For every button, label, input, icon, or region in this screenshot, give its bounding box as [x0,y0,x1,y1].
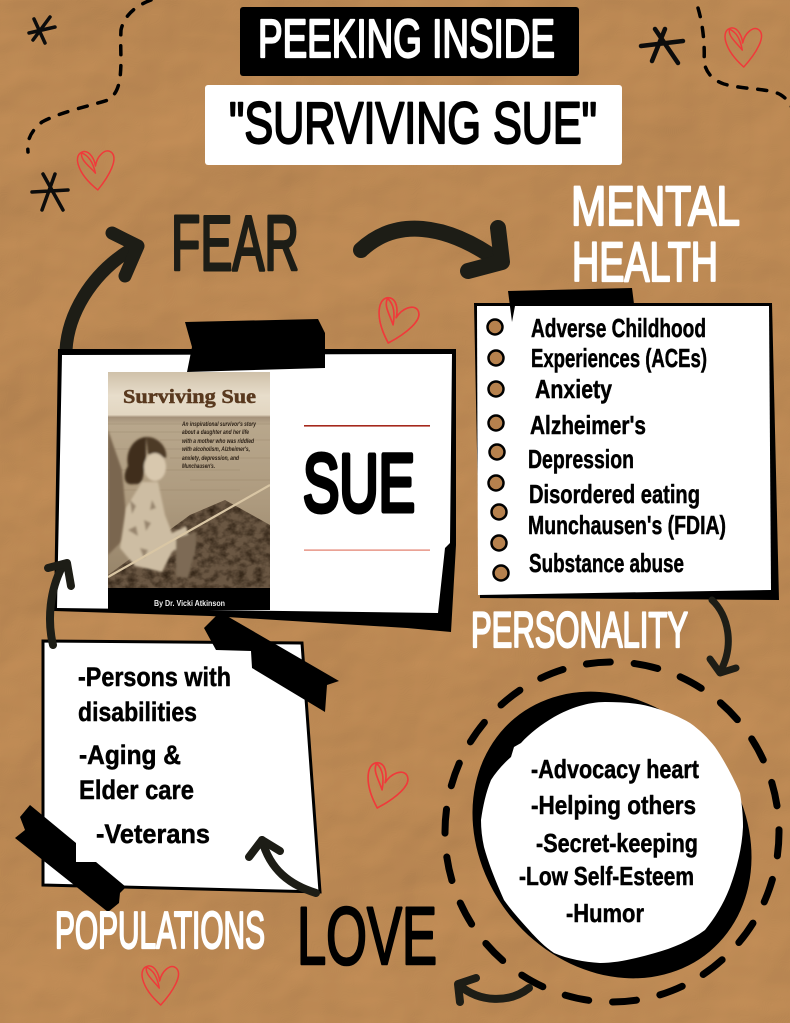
book blurb [181,422,257,470]
book author: By Dr. Vicki Atkinson [154,598,225,608]
title: surviving sue: "SURVIVING SUE" [229,91,597,156]
list items: Munchausen's (FDIA) [528,510,726,540]
trait list [519,754,699,928]
list items: Experiences (ACEs) [531,343,707,373]
rocks [108,500,270,588]
trait list: -Secret-keeping [536,828,698,858]
icon: asterisk left [32,174,68,210]
list items [528,313,726,578]
icon: heart bottom [141,963,181,1006]
panel: populations [15,612,339,912]
arrow: book panel to fear [66,233,138,350]
girl [120,437,196,578]
book blurb: An inspirational survivor's story [181,422,257,428]
trait list: -Advocacy heart [531,754,699,784]
arrow: fear to mental health [361,228,502,271]
icon: asterisk top left [29,17,55,43]
panel: book [54,319,456,632]
trait list: -Low Self-Esteem [519,861,694,891]
heading: love: LOVE [297,891,437,982]
heading: populations: POPULATIONS [55,902,265,960]
arrow: personality to circle [710,600,736,673]
population list: -Persons with [78,662,231,692]
icon: heart above book panel [371,296,421,349]
list items: Depression [528,444,634,474]
trait list: -Humor [566,898,644,928]
book blurb: about a daughter and her life [182,430,250,436]
water ripples [108,424,270,490]
book blurb: with alcoholism, Alzheimer's, [182,447,250,453]
list items: Anxiety [535,374,612,404]
book blurb: with a mother who was riddled [182,439,254,445]
title: surviving sue [205,85,622,165]
panel: personality circle [415,635,790,1023]
tape [185,319,325,372]
arrow: circle to love [458,978,529,1002]
decorative dashed path: top right [698,8,790,108]
heading: mental health [571,174,740,293]
population list [78,662,231,849]
label: sue: SUE [303,438,415,529]
population list: -Aging & [79,740,181,770]
tape top right [204,612,339,712]
decorative dashed path: top left [28,0,151,152]
list items: Alzheimer's [530,410,646,440]
book blurb: anxiety, depression, and [182,456,239,462]
dashed ring [445,662,779,1002]
list markers [488,320,508,580]
rule below sue [304,550,430,551]
panel paper [477,306,771,595]
list items: Adverse Childhood [531,313,706,343]
panel shadow [54,349,456,632]
heading: fear: FEAR [171,199,299,287]
icon: heart top right [724,25,764,68]
list items: Substance abuse [529,548,684,578]
icon: asterisk top right [641,29,683,63]
panel paper [57,354,452,613]
fishing rod [108,485,270,577]
icon: heart top left [76,147,118,192]
tape bottom left [15,805,126,912]
arrow: love to populations [249,840,316,893]
book title: Surviving Sue [123,387,256,408]
list items: Disordered eating [529,479,700,509]
panel paper [43,641,320,892]
rule above sue [304,425,430,427]
heading: mental health: MENTAL [571,174,740,237]
black blob [415,635,790,1023]
tape [508,288,634,322]
panel: mental health list [474,288,779,600]
icon: heart center [360,761,410,814]
panel shadow [474,303,779,600]
trait list: -Helping others [531,790,696,820]
heading: mental health: HEALTH [572,230,718,293]
population list: -Veterans [96,819,210,849]
book blurb: Munchausen's. [182,464,215,470]
title: peeking inside: PEEKING INSIDE [258,9,555,69]
population list: Elder care [79,775,194,805]
title: peeking inside [240,7,579,76]
arrow: populations to book [48,563,71,645]
population list: disabilities [78,697,197,727]
book cover [108,372,270,610]
white blob [481,702,743,963]
